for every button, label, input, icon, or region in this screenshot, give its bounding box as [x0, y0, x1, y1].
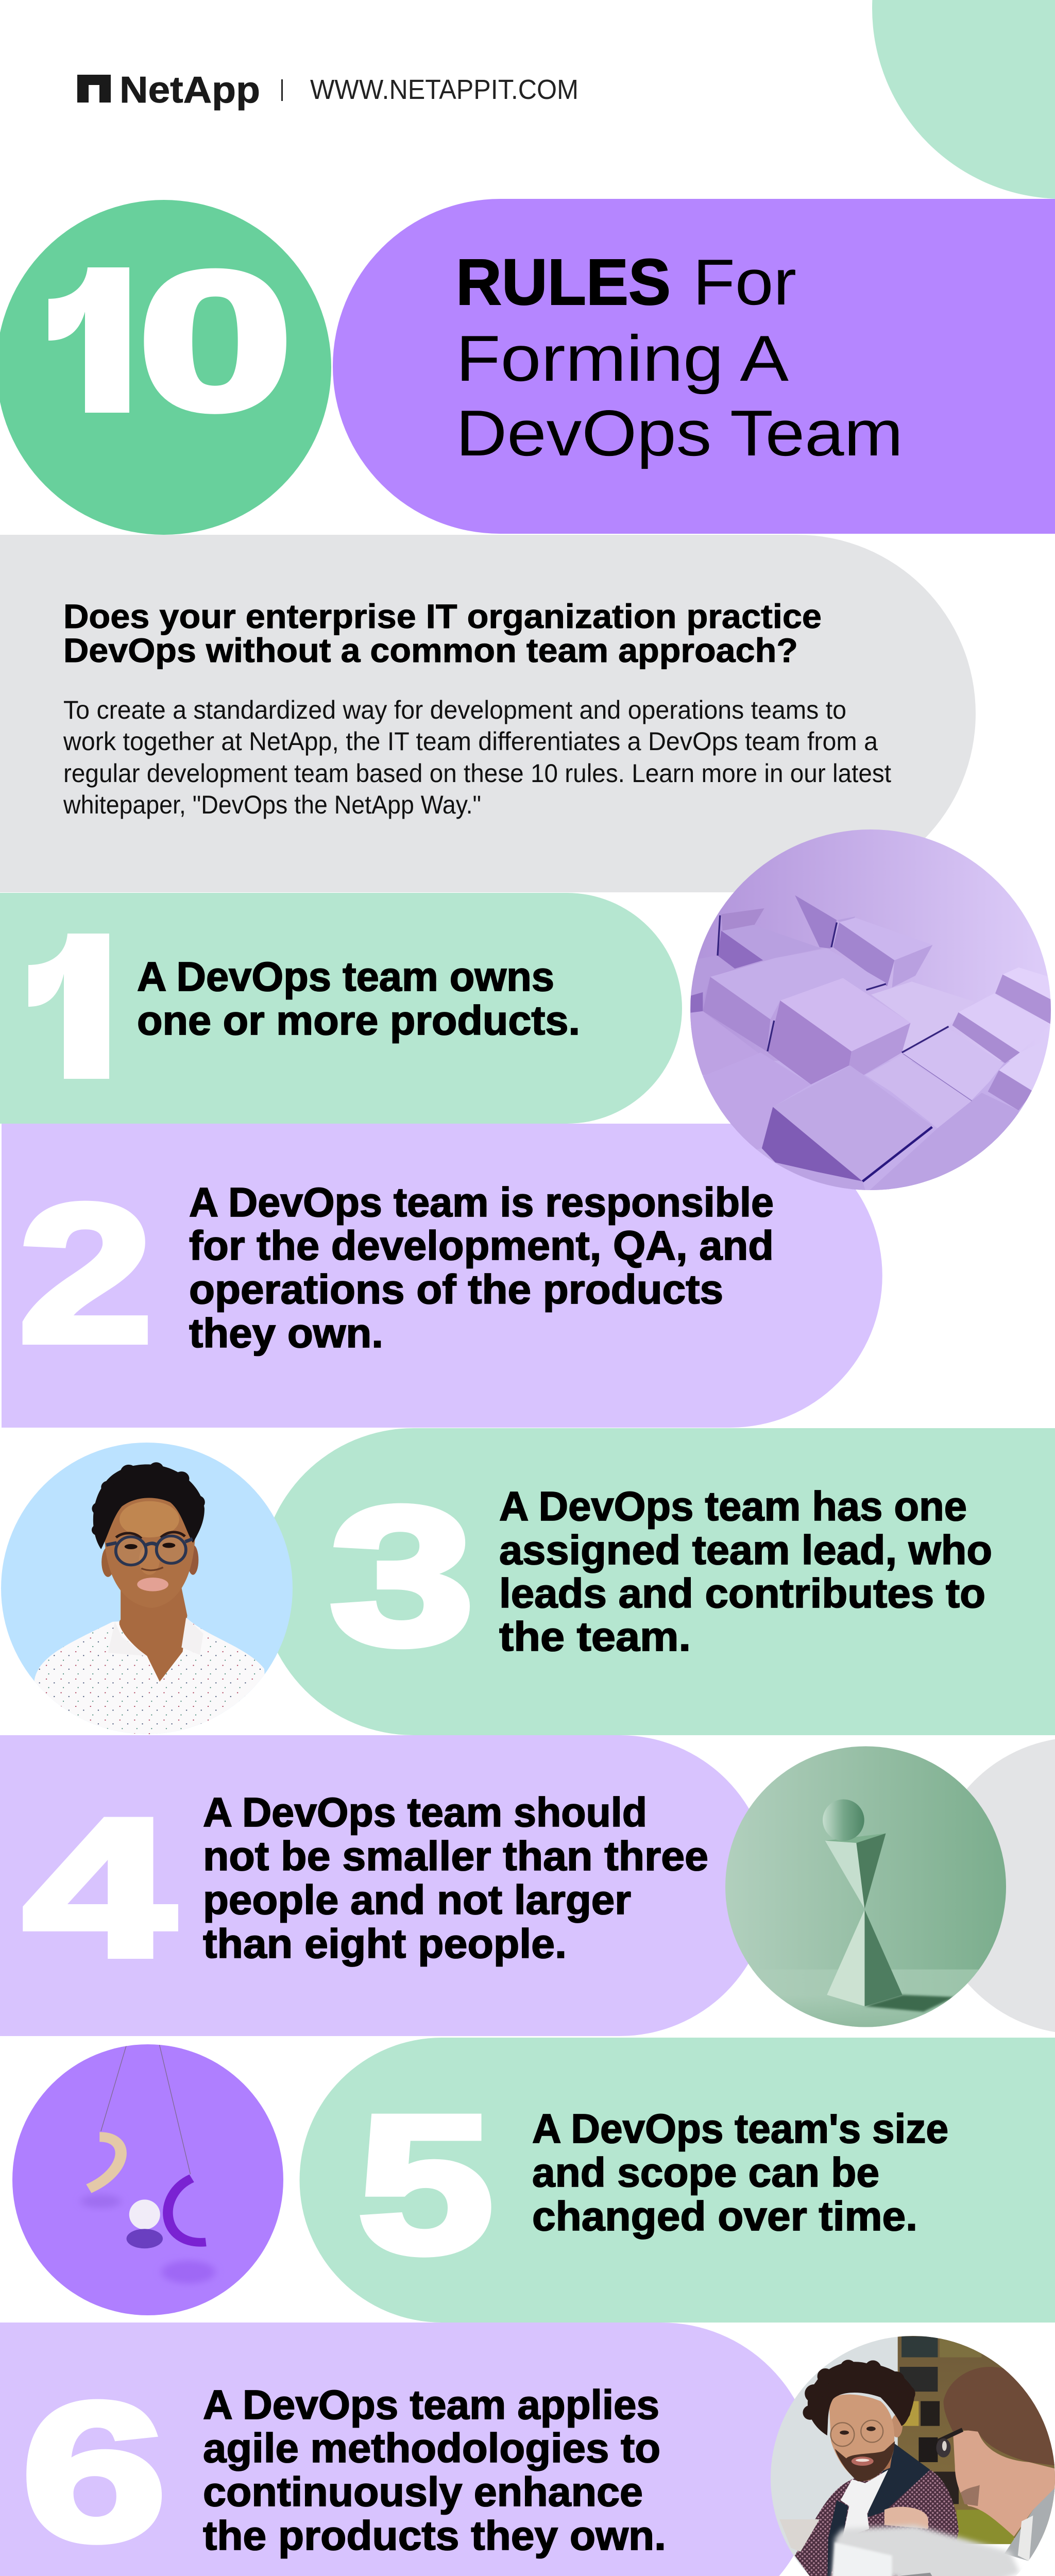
- panel: rule 3: assigned team lead, who: [499, 1527, 992, 1573]
- panel: introduction: [0, 535, 976, 892]
- decorative grey circle beside rule 4: [931, 1737, 1055, 2034]
- panel: introduction: To create a standardized way for development and operations teams to: [63, 696, 846, 724]
- image: two colleagues talking: [762, 2329, 1055, 2576]
- title panel: DevOps Team: [456, 397, 903, 469]
- panel: rule 5: A DevOps team's size: [532, 2106, 948, 2151]
- panel: rule 4: [0, 1735, 770, 2036]
- panel: rule 3: the team.: [499, 1614, 691, 1659]
- title panel: For: [693, 246, 796, 318]
- panel: rule 4: than eight people.: [203, 1921, 567, 1967]
- panel: introduction: DevOps without a common team approach?: [63, 631, 798, 669]
- panel: rule 5: changed over time.: [532, 2193, 917, 2239]
- image: purple 3D cubes: [690, 829, 1051, 1190]
- panel: introduction: Does your enterprise IT organization practice: [63, 597, 822, 635]
- panel: rule 1: one or more products.: [137, 997, 580, 1043]
- panel: rule 6: A DevOps team applies: [203, 2382, 659, 2428]
- decorative mint circle top right: [872, 0, 1055, 199]
- NetApp wordmark: NetApp: [120, 70, 260, 111]
- panel: introduction: work together at NetApp, the IT team differentiates a DevOps team from a: [63, 727, 878, 756]
- title panel: [333, 199, 1055, 534]
- hero badge: big 10: 0: [138, 231, 293, 450]
- panel: rule 4: not be smaller than three: [203, 1833, 708, 1879]
- image: hanging shapes on purple: [0, 2039, 290, 2321]
- panel: rule 5: [300, 2038, 1055, 2323]
- title panel: RULES: [456, 246, 671, 318]
- panel: rule 6: 6: [22, 2362, 166, 2576]
- header logo and url: [77, 70, 578, 111]
- panel: rule 6: [0, 2323, 815, 2576]
- separator bar: [281, 79, 283, 101]
- panel: introduction: regular development team based on these 10 rules. Learn more in our latest: [63, 759, 891, 788]
- panel: rule 6: the products they own.: [203, 2513, 666, 2558]
- panel: rule 3: leads and contributes to: [499, 1570, 985, 1616]
- website url: WWW.NETAPPIT.COM: [310, 74, 578, 105]
- panel: rule 4: people and not larger: [203, 1877, 631, 1923]
- panel: rule 2: 2: [19, 1164, 153, 1383]
- panel: rule 3: A DevOps team has one: [499, 1483, 967, 1529]
- panel: rule 5: 5: [358, 2075, 494, 2294]
- panel: rule 1: A DevOps team owns: [137, 954, 554, 999]
- panel: rule 2: for the development, QA, and: [189, 1223, 774, 1268]
- panel: rule 2: [2, 1124, 882, 1428]
- panel: rule 4: 4: [24, 1778, 176, 1997]
- icon: NetApp logo mark: [77, 75, 111, 103]
- panel: rule 2: they own.: [189, 1310, 383, 1356]
- panel: rule 1: [0, 893, 682, 1124]
- title panel: Forming A: [456, 322, 789, 395]
- panel: rule 5: and scope can be: [532, 2149, 879, 2195]
- hero badge: big 10: 1: [50, 235, 159, 454]
- panel: rule 1: 1: [30, 902, 139, 1121]
- panel: rule 2: operations of the products: [189, 1266, 723, 1312]
- image: balanced green geometric sculpture: [721, 1741, 1015, 2030]
- panel: rule 3: [260, 1428, 1055, 1735]
- panel: rule 2: A DevOps team is responsible: [189, 1179, 774, 1225]
- panel: rule 6: agile methodologies to: [203, 2425, 660, 2471]
- hero badge: big 10: [0, 200, 331, 535]
- panel: rule 3: 3: [330, 1466, 474, 1685]
- panel: rule 4: A DevOps team should: [203, 1789, 647, 1835]
- panel: rule 6: continuously enhance: [203, 2469, 643, 2515]
- image: portrait of woman with glasses: [0, 1443, 294, 1741]
- panel: introduction: whitepaper, "DevOps the NetApp Way.": [63, 790, 481, 819]
